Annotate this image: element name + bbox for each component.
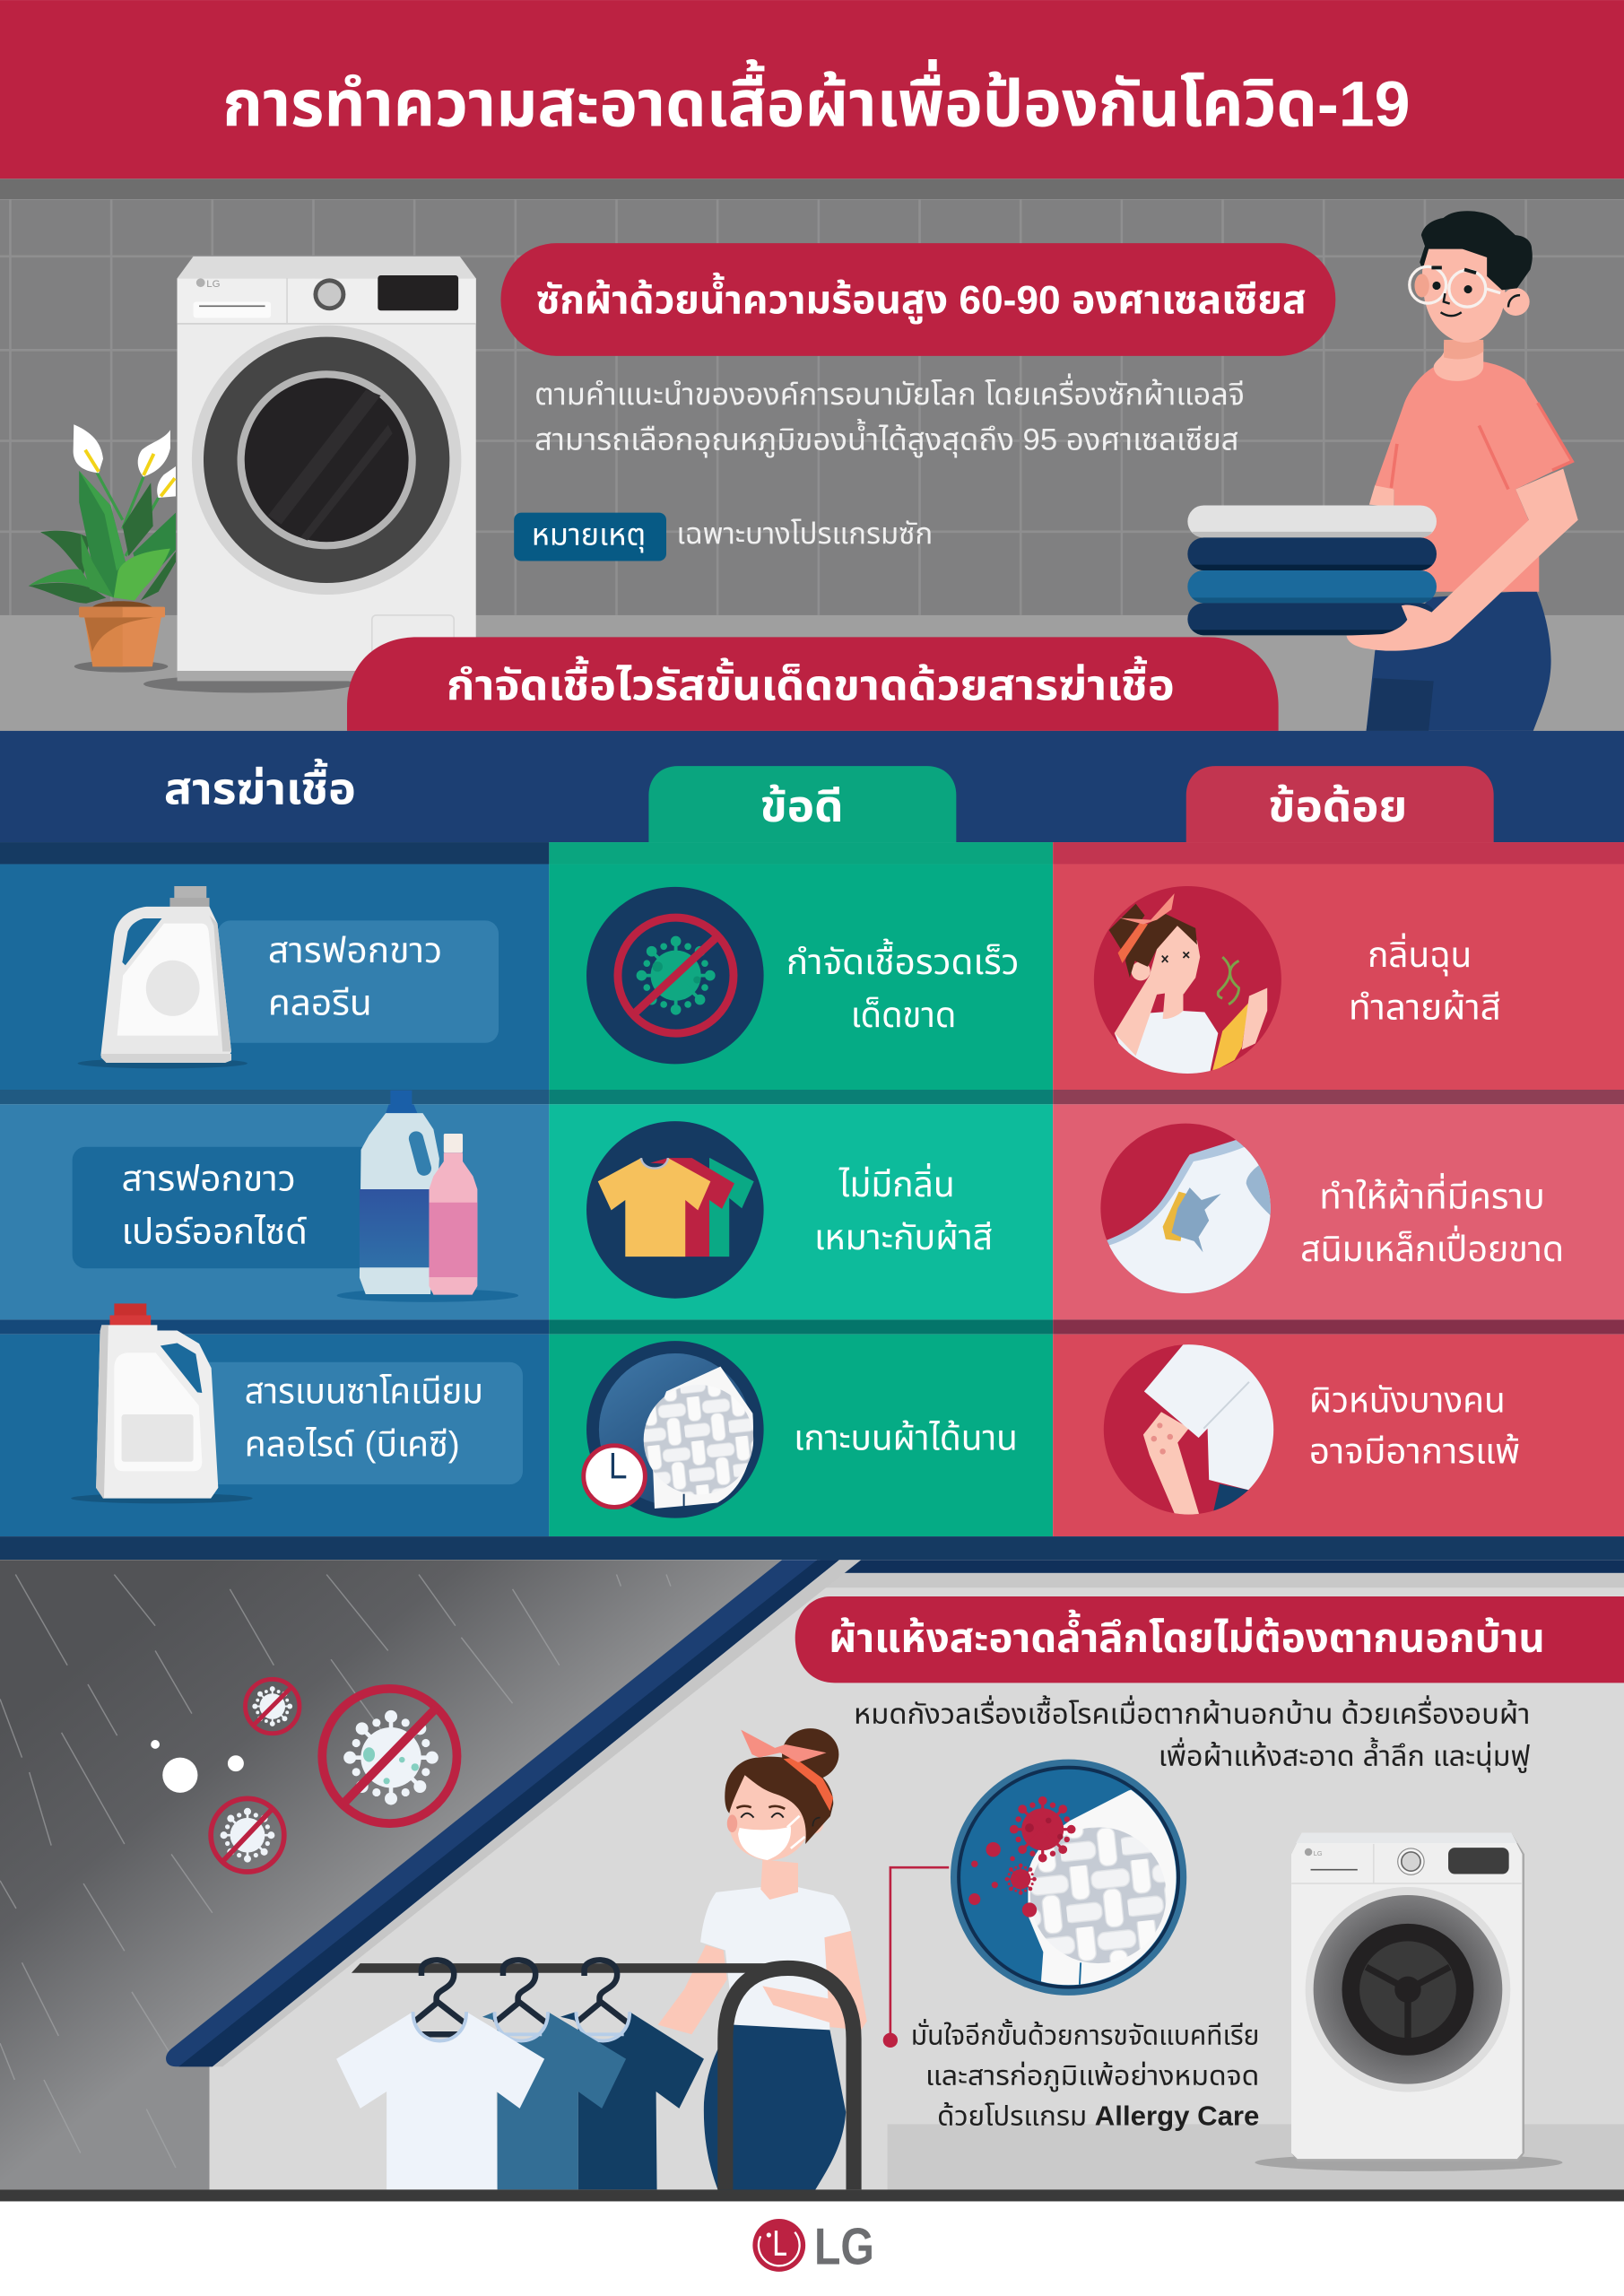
t-shirt (700, 1887, 851, 2030)
trousers (1367, 590, 1551, 731)
row 2 con: สนิมเหล็กเปื่อยขาด (1300, 1225, 1564, 1269)
shirt mid (482, 2012, 626, 2189)
table cell backgrounds (0, 865, 1624, 1560)
row 3 con: ผิวหนังบางคน (1309, 1381, 1506, 1420)
roof beam (166, 1560, 839, 2066)
tab: cons (1186, 766, 1494, 842)
text block: allergy care: มั่นใจอีกขั้นด้วยการขจัดแบคทีเรีย (911, 2018, 1259, 2051)
column heading: disinfectant: สารฆ่าเชื้อ (164, 759, 356, 814)
row 3 pro: เกาะบนผ้าได้นาน (794, 1420, 1018, 1458)
text block: WHO recommendation: สามารถเลือกอุณหภูมิของน้ำได้สูงสุดถึง 95 องศาเซลเซียส (534, 418, 1239, 457)
row 2 pro (586, 1121, 993, 1299)
row 2: peroxide bleach: เปอร์ออกไซด์ (122, 1213, 308, 1251)
text block: WHO recommendation: ตามคำแนะนำขององค์การอนามัยโลก โดยเครื่องซักผ้าแอลจี (534, 373, 1245, 412)
text block: WHO recommendation (534, 373, 1245, 457)
row 1: chlorine bleach: คลอรีน (268, 985, 372, 1023)
tab: cons: ข้อด้อย (1268, 783, 1407, 831)
title: การทำความสะอาดเสื้อผ้าเพื่อป้องกันโควิด-19 (222, 58, 1411, 140)
roof beam shadow strip (213, 1560, 861, 2066)
row 2 con (1100, 1124, 1564, 1303)
logo: LG: LG (814, 2219, 874, 2276)
small virus bottom (211, 1798, 284, 1872)
text block: allergy care: ด้วยโปรแกรม Allergy Care (937, 2102, 1259, 2132)
shirt dark (560, 2012, 704, 2189)
right arm (824, 1931, 867, 2030)
row 1: chlorine bleach: สารฟอกขาว (268, 932, 442, 970)
row 2: peroxide bleach: สารฟอกขาว (122, 1161, 296, 1199)
hanger bar 1 (419, 2032, 460, 2036)
table header band (0, 731, 1624, 865)
shirt (1375, 361, 1574, 592)
text block: allergy care (911, 2018, 1259, 2132)
row 2 pro: เหมาะกับผ้าสี (814, 1219, 993, 1257)
icon: potted plant (29, 424, 176, 673)
tab: pros (648, 766, 956, 842)
text block: dryer description: เพื่อผ้าแห้งสะอาด ล้ำลึก และนุ่มฟู (1159, 1737, 1530, 1773)
left forearm (1369, 485, 1394, 507)
hanger 2 bar (494, 2012, 548, 2040)
row 3: benzalkonium chloride: คลอไรด์ (บีเคซี) (245, 1425, 460, 1464)
rack arch (725, 1968, 854, 2189)
note: หมายเหตุ (532, 518, 646, 553)
icon: woman smelling yellow cloth (1094, 886, 1281, 1083)
icon: coloured t-shirts (586, 1121, 764, 1299)
rail (352, 1963, 766, 1973)
icon: viruses prohibited outdoors (151, 1679, 456, 1872)
row 3: benzalkonium chloride: สารเบนซาโคเนียม (245, 1372, 483, 1411)
panel: outdoor rain (0, 1560, 782, 2189)
hair (725, 1757, 833, 1844)
heading pill: disinfectants (347, 637, 1279, 731)
icon: chlorine bottle (100, 886, 231, 1063)
heading pill: dryer: ผ้าแห้งสะอาดล้ำลึกโดยไม่ต้องตากนอกบ้าน (829, 1609, 1545, 1661)
title banner (0, 0, 1624, 178)
logo: LG (751, 2216, 874, 2276)
hanger 2 (494, 1960, 546, 2022)
illustration: woman with mask (658, 1728, 867, 2195)
icon: peroxide bottles (360, 1091, 477, 1295)
icon: LG washing machine (143, 257, 476, 692)
icon: LG washing machine: LG (206, 279, 221, 290)
small virus top (246, 1679, 300, 1734)
neck (1434, 343, 1483, 381)
large virus (322, 1689, 456, 1823)
heading pill: hot water wash: ซักผ้าด้วยน้ำความร้อนสูง 60-90 องศาเซลเซียส (536, 273, 1307, 325)
icon: skin rash (1104, 1344, 1289, 1518)
icon: magnified fabric with bacteria (951, 1760, 1186, 1996)
face (1422, 246, 1506, 343)
row 2 pro: ไม่มีกลิ่น (838, 1163, 955, 1205)
row 3 pro (584, 1341, 1018, 1518)
row 3 con (1104, 1344, 1520, 1518)
text block: allergy care: และสารก่อภูมิแพ้อย่างหมดจด (925, 2062, 1259, 2092)
icon: LG dryer (1255, 1832, 1562, 2171)
note: เฉพาะบางโปรแกรมซัก (676, 517, 933, 550)
trousers (704, 2025, 846, 2195)
heading pill: dryer (795, 1596, 1624, 1683)
illustration: man carrying towels (1187, 211, 1578, 731)
laundry room backdrop (0, 178, 1624, 733)
row 3 con: อาจมีอาการแพ้ (1309, 1432, 1520, 1471)
heading pill: disinfectants: กำจัดเชื้อไวรัสขั้นเด็ดขาดด้วยสารฆ่าเชื้อ (447, 656, 1175, 710)
row 1: chlorine bleach (78, 886, 499, 1068)
illustration: clothes rack with shirts (336, 1960, 854, 2189)
connector dot (883, 2033, 898, 2048)
row 1 con: ทำลายผ้าสี (1349, 989, 1501, 1028)
neck (760, 1859, 798, 1900)
icon: fabric with clock (584, 1341, 764, 1518)
mask (738, 1826, 791, 1860)
connector line (890, 1867, 949, 2040)
hanger 3 bar (576, 2012, 630, 2040)
icon: virus prohibited (586, 887, 764, 1064)
bottom rule (0, 2189, 1624, 2201)
left arm (658, 1945, 727, 2034)
row 1 con: กลิ่นฉุน (1368, 933, 1472, 976)
towel stack (1187, 505, 1437, 635)
note (514, 513, 933, 561)
glasses (1410, 266, 1500, 307)
row 3: benzalkonium chloride (71, 1303, 523, 1503)
roof beam dark side (178, 1560, 839, 2066)
row 1 pro: กำจัดเชื้อรวดเร็ว (786, 938, 1020, 982)
row 2 con: ทำให้ผ้าที่มีคราบ (1319, 1172, 1545, 1216)
hanger 3 (577, 1960, 628, 2022)
icon: LG dryer: LG (1314, 1849, 1323, 1857)
shirt white (336, 2012, 544, 2189)
heading pill: hot water wash (500, 243, 1335, 356)
row 1 con (1094, 886, 1501, 1083)
arm and hand (1347, 469, 1578, 651)
text block: dryer description (854, 1694, 1530, 1773)
panel: indoor drying backdrop (0, 1560, 1624, 2190)
hair (1420, 211, 1533, 290)
tab: pros: ข้อดี (760, 783, 844, 831)
bun (782, 1728, 838, 1780)
face (729, 1775, 810, 1860)
headband (784, 1758, 833, 1811)
row 2: peroxide bleach (73, 1091, 518, 1302)
row 1 pro: เด็ดขาด (851, 996, 956, 1035)
icon: benzalkonium bottle (96, 1303, 218, 1499)
hanger 1 (413, 1960, 465, 2022)
row 1 pro (586, 887, 1020, 1064)
icon: rust stain on cloth (1100, 1123, 1271, 1293)
text block: dryer description: หมดกังวลเรื่องเชื้อโรคเมื่อตากผ้านอกบ้าน ด้วยเครื่องอบผ้า (854, 1694, 1530, 1729)
forearm (762, 1986, 837, 2025)
collar (413, 2012, 466, 2040)
